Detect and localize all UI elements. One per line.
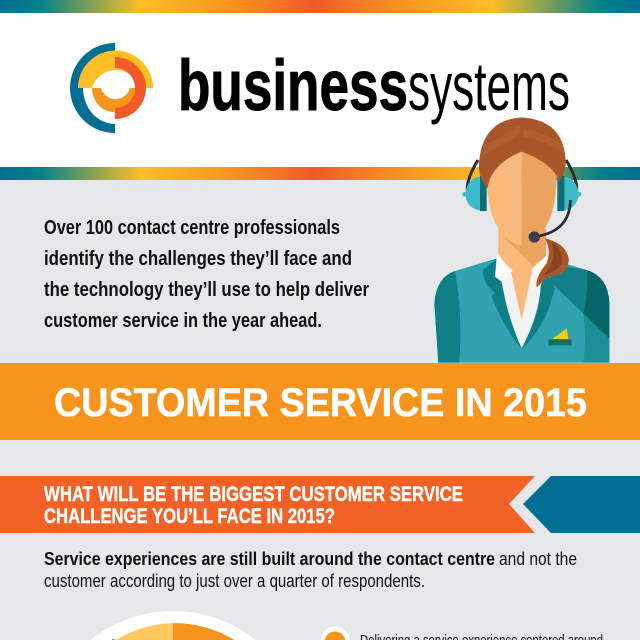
neck [498,228,546,320]
collar flaps [495,255,549,284]
pie chart [90,611,256,640]
ribbon arrow [523,476,640,533]
face [487,150,522,246]
section heading [44,482,463,528]
section body text [44,548,577,591]
section body text: Service experiences are still built around the contact centre [44,548,495,569]
intro text: identify the challenges they’ll face and [44,248,352,270]
jacket [434,259,609,363]
headset band [467,160,577,190]
title: CUSTOMER SERVICE IN 2015 [54,381,587,425]
section heading: CHALLENGE YOU’LL FACE IN 2015? [44,504,335,528]
lapels [483,259,522,349]
section body text: and not the [499,548,577,569]
logo wordmark: business [178,47,408,126]
intro text [44,217,369,332]
logo icon [70,43,153,133]
legend item [320,627,603,640]
intro text: Over 100 contact centre professionals [44,217,340,239]
section body text: customer according to just over a quarter of respondents. [44,570,425,591]
intro text: the technology they’ll use to help deliver [44,279,369,301]
section heading: WHAT WILL BE THE BIGGEST CUSTOMER SERVICE [44,482,463,506]
shirt [495,257,548,348]
microphone [535,200,570,237]
header panel [0,13,640,167]
ear cups [465,177,481,211]
top gradient band [0,0,640,13]
ponytail [536,238,569,287]
pocket badge [552,328,568,339]
title banner [0,363,640,440]
section ribbon [0,476,640,533]
intro text: customer service in the year ahead. [44,310,322,332]
illustration: call centre agent with headset [434,117,609,363]
lower gradient band [0,167,640,180]
hair [479,117,566,188]
